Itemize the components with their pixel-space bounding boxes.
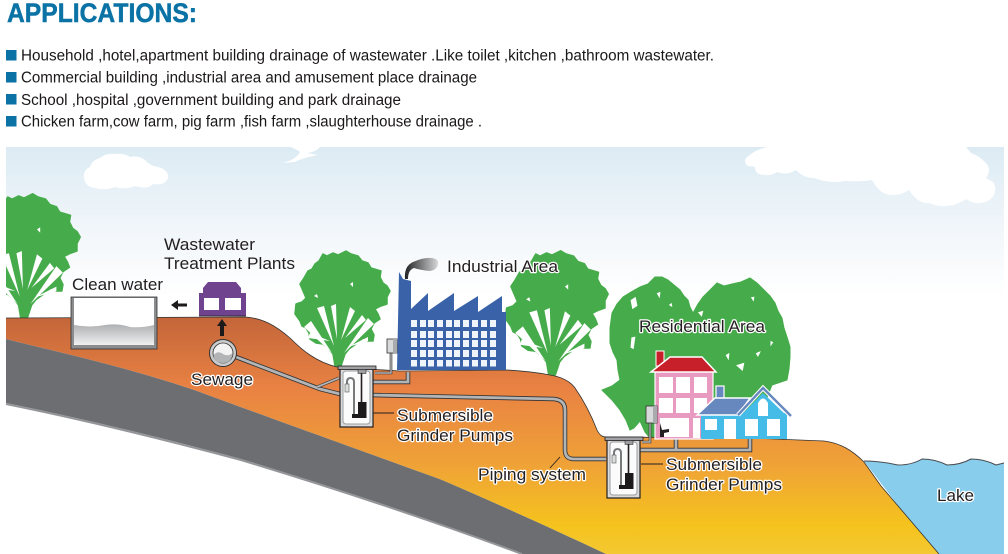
tree: left of factory (295, 251, 390, 366)
list item 2: Commercial building ,industrial area and amusement place drainage (21, 70, 477, 86)
label: submersible grinder pumps (residential): Submersible (666, 456, 762, 474)
label: wastewater treatment plants: Wastewater (164, 236, 256, 254)
sky (6, 147, 1004, 297)
label: industrial area: Industrial Area (447, 258, 559, 276)
factory (397, 272, 506, 370)
pink apartment building (651, 351, 716, 439)
factory smoke (405, 258, 438, 279)
sewage chamber (210, 340, 236, 366)
cloud: right (745, 147, 995, 206)
clean water tank (71, 297, 157, 349)
pump pit: residential (605, 437, 643, 498)
tree: far left (0, 194, 80, 318)
tree: right of factory (506, 251, 608, 375)
ground (6, 317, 939, 554)
label: clean water: Clean water (72, 276, 164, 294)
control box: residential (646, 406, 657, 423)
label: submersible grinder pumps (residential) (666, 456, 782, 494)
wastewater treatment plant (199, 282, 246, 316)
lake (864, 459, 1004, 554)
rock layer (6, 339, 606, 554)
leader lines (373, 413, 663, 468)
label: piping system: Piping system (478, 466, 586, 484)
pump pit: industrial (338, 366, 376, 427)
label: submersible grinder pumps (residential): Grinder Pumps (666, 476, 782, 494)
list item 1: Household ,hotel,apartment building drainage of wastewater .Like toilet ,kitchen ,bathroom wastewater. (21, 48, 714, 64)
label: lake: Lake (937, 487, 974, 505)
control box: factory (387, 339, 397, 353)
application list (6, 48, 714, 130)
label: residential area: Residential Area (639, 318, 766, 336)
label: submersible grinder pumps (industrial) (397, 407, 513, 445)
cloud: wisp (282, 147, 320, 163)
piping system (236, 352, 750, 459)
label: submersible grinder pumps (industrial): Submersible (397, 407, 493, 425)
blue house (697, 386, 791, 439)
cloud: left (84, 154, 168, 189)
arrow: up to plant (217, 319, 227, 336)
trees: residential (602, 277, 790, 438)
label: wastewater treatment plants (164, 236, 295, 273)
label: sewage: Sewage (191, 371, 253, 389)
label: submersible grinder pumps (industrial): Grinder Pumps (397, 427, 513, 445)
list item 4: Chicken farm,cow farm, pig farm ,fish farm ,slaughterhouse drainage . (21, 114, 482, 130)
label: wastewater treatment plants: Treatment Plants (164, 255, 295, 273)
list item 3: School ,hospital ,government building and park drainage (21, 92, 401, 109)
arrow: to clean water (171, 300, 187, 310)
